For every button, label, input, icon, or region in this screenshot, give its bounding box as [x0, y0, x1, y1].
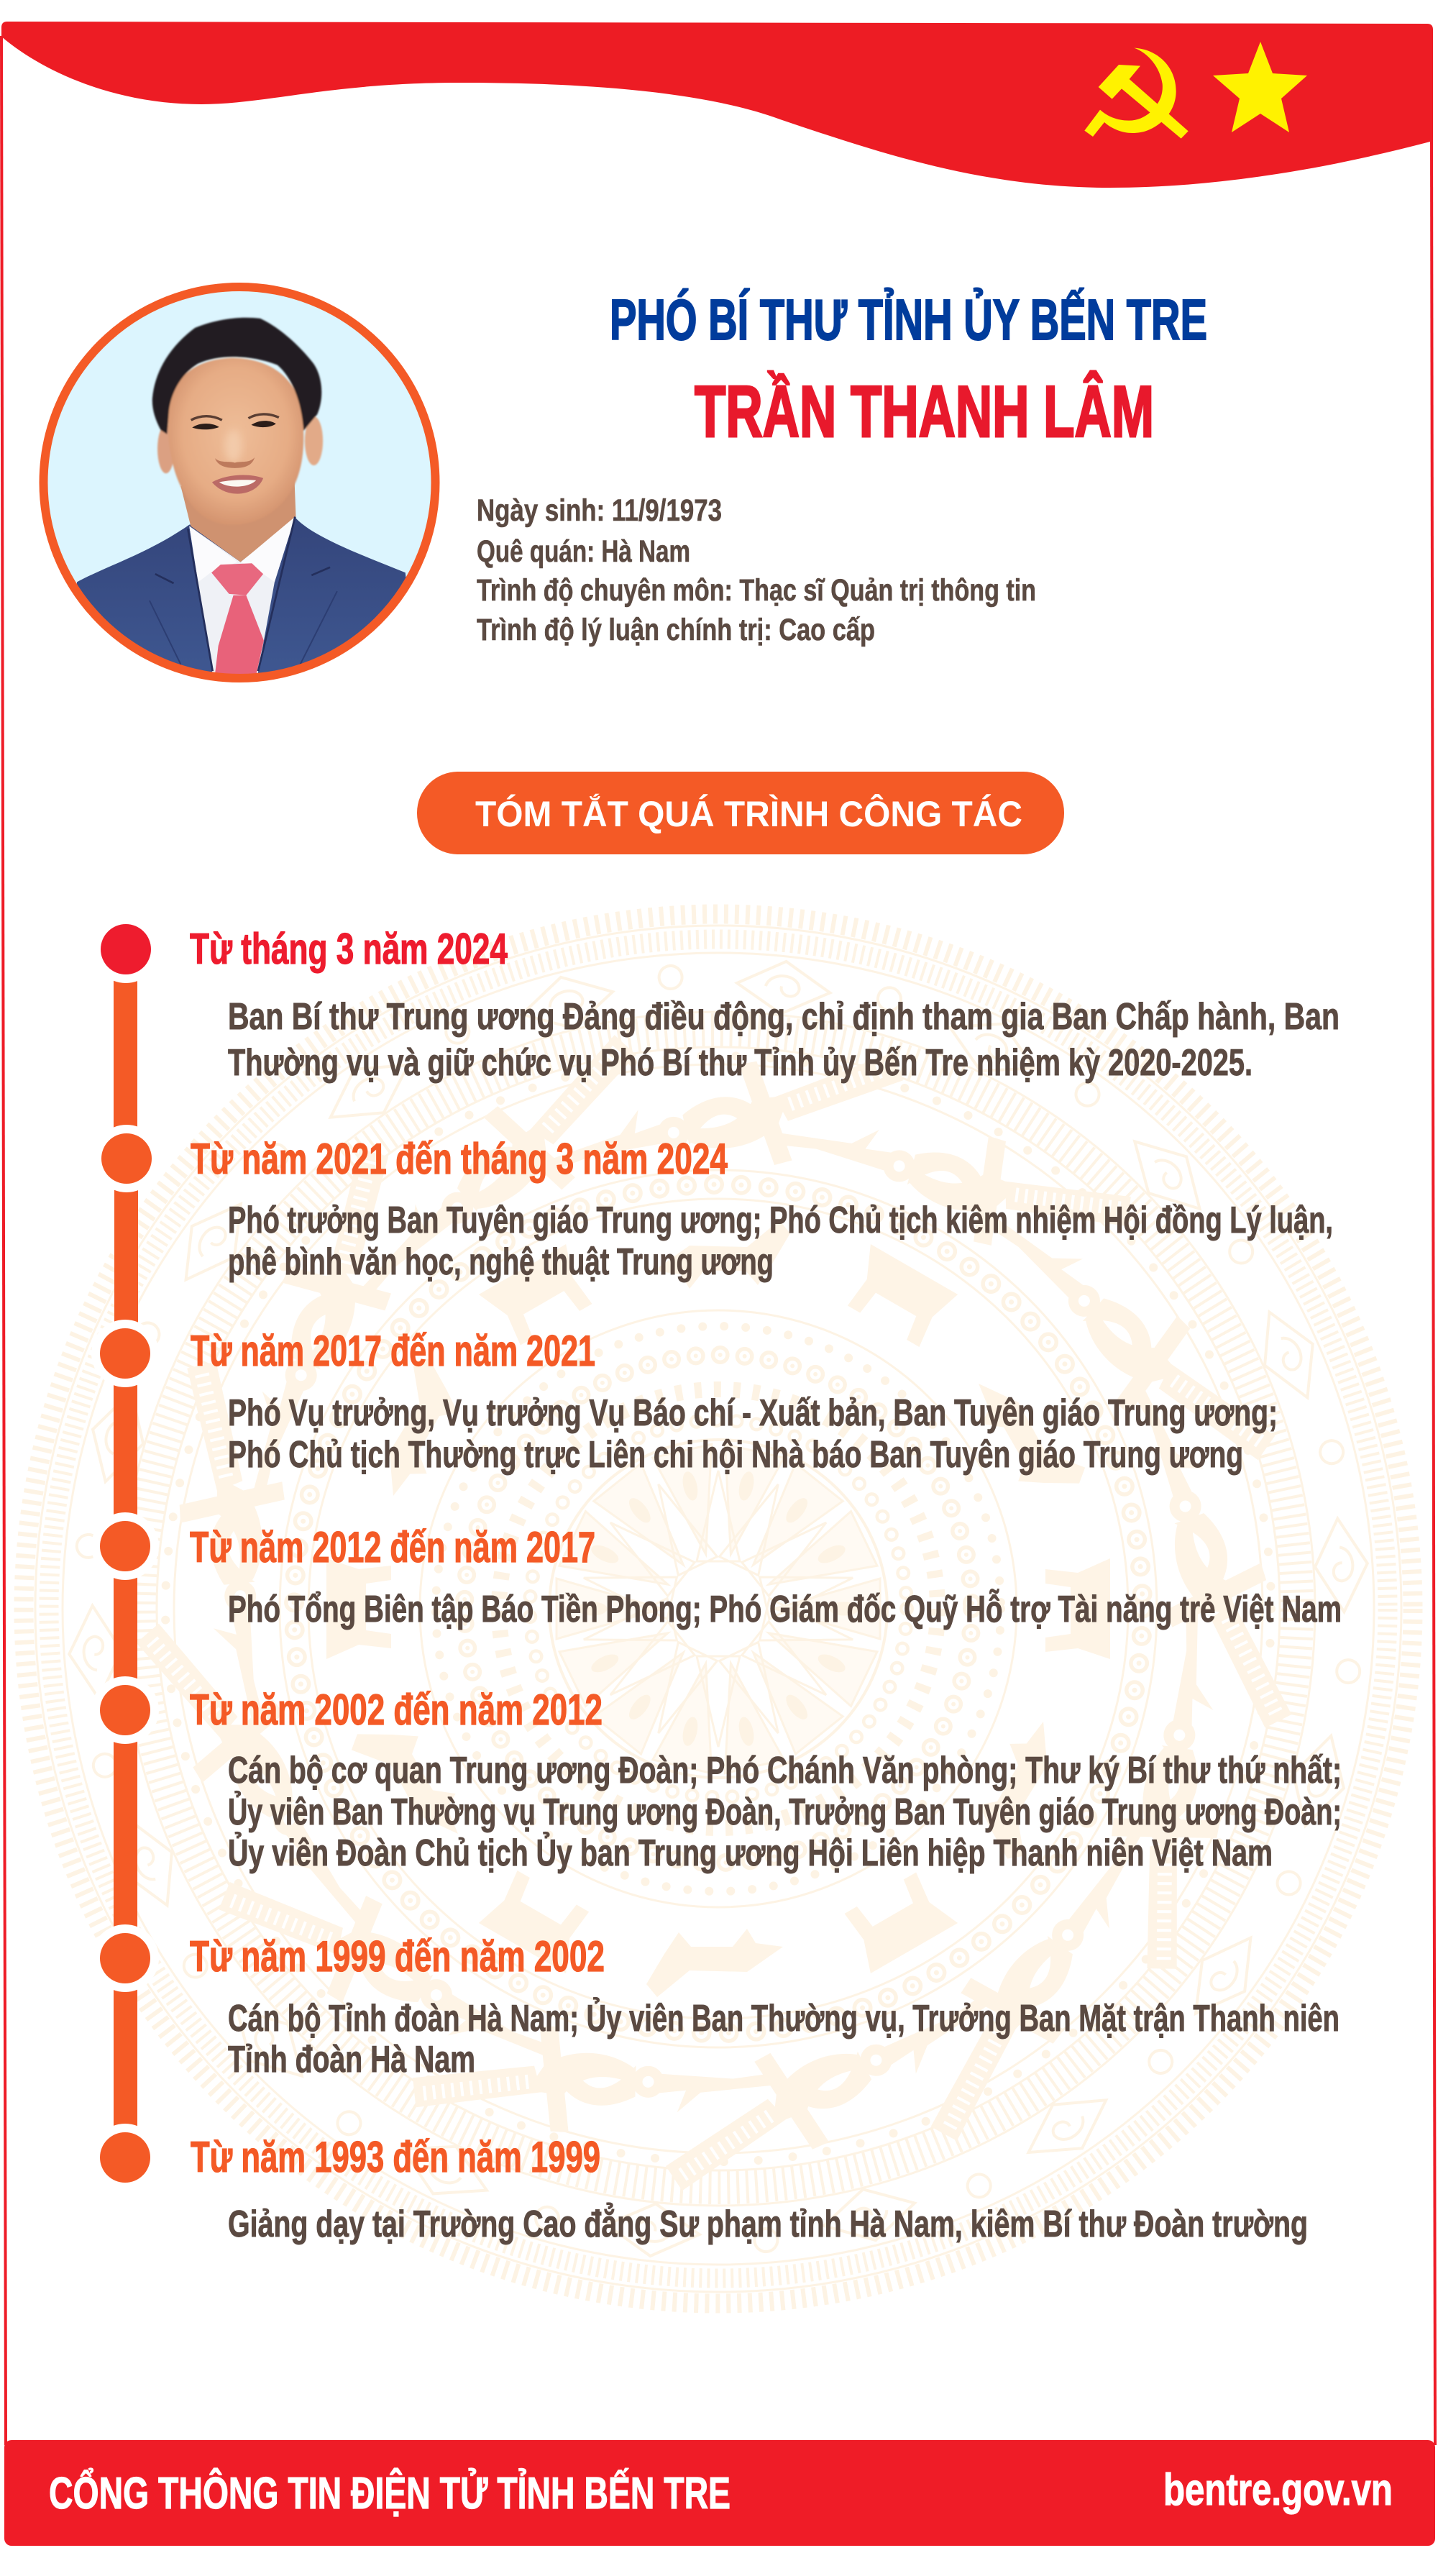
timeline entry: 1999-2002	[190, 1932, 1339, 2081]
timeline entry: 2021-2024	[191, 1135, 1333, 1283]
section pill heading: TÓM TẮT QUÁ TRÌNH CÔNG TÁC	[475, 793, 1022, 834]
timeline entry: 2017-2021	[191, 1327, 1278, 1476]
timeline entry: 2024: Từ tháng 3 năm 2024	[190, 925, 508, 973]
personal info block: Ngày sinh: 11/9/1973	[477, 493, 722, 528]
heading: name: TRẦN THANH LÂM	[695, 371, 1154, 452]
section pill heading	[417, 772, 1064, 854]
timeline entry: 1999-2002: Từ năm 1999 đến năm 2002	[190, 1932, 605, 1981]
heading: position title: PHÓ BÍ THƯ TỈNH ỦY BẾN TRE	[610, 288, 1207, 352]
timeline entry: 1993-1999: Từ năm 1993 đến năm 1999	[191, 2133, 600, 2181]
timeline entry: 2002-2012	[190, 1686, 1342, 1874]
personal info block: Quê quán: Hà Nam	[477, 534, 690, 569]
icon: yellow star	[1213, 42, 1307, 132]
footer band	[4, 2440, 1435, 2546]
timeline entry: 2012-2017: Từ năm 2012 đến năm 2017	[190, 1523, 595, 1571]
timeline connector bars	[114, 971, 138, 2136]
icon: hammer and sickle	[1084, 48, 1189, 139]
personal info block: Trình độ lý luận chính trị: Cao cấp	[477, 613, 875, 647]
timeline entry: 1993-1999	[191, 2133, 1308, 2245]
footer band: CỔNG THÔNG TIN ĐIỆN TỬ TỈNH BẾN TRE	[49, 2468, 731, 2518]
timeline entry: 2012-2017	[190, 1523, 1342, 1630]
timeline dots	[91, 915, 160, 2191]
timeline entry: 2021-2024: phê bình văn học, nghệ thuật Trung ương	[228, 1241, 774, 1283]
personal info block: Trình độ chuyên môn: Thạc sĩ Quản trị thông tin	[477, 573, 1036, 608]
timeline entry: 2024	[190, 925, 1339, 1084]
timeline entry: 2002-2012: Từ năm 2002 đến năm 2012	[190, 1686, 603, 1734]
timeline entry: 1999-2002: Tỉnh đoàn Hà Nam	[228, 2039, 475, 2081]
personal info block	[477, 493, 1036, 647]
background bronze drum watermark	[24, 914, 1413, 2303]
timeline entry: 2021-2024: Từ năm 2021 đến tháng 3 năm 2024	[191, 1135, 728, 1183]
timeline entry: 2017-2021: Từ năm 2017 đến năm 2021	[191, 1327, 595, 1375]
top red flag banner	[1, 22, 1433, 188]
portrait photo in orange ring	[43, 287, 436, 699]
